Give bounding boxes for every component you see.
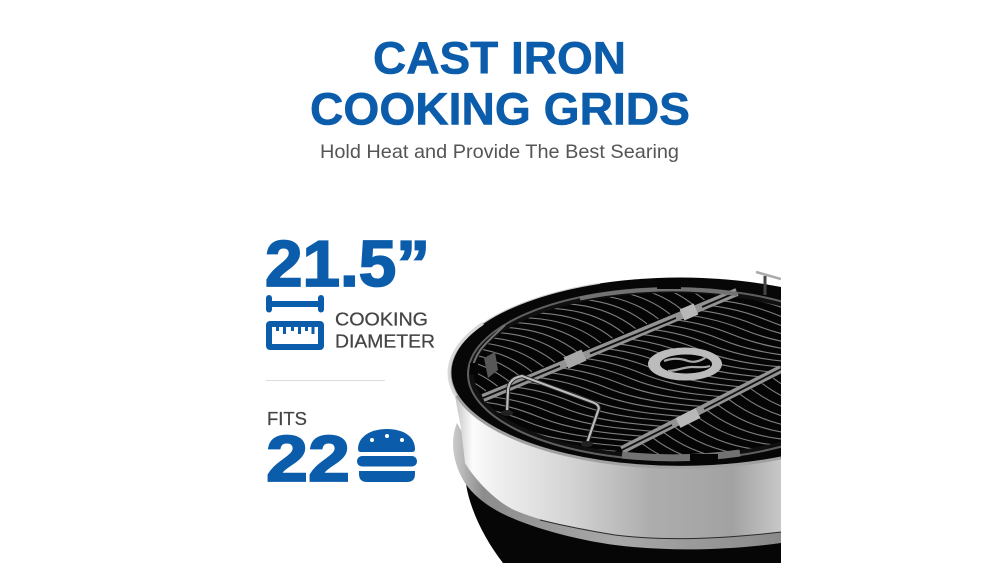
diameter label (335, 308, 435, 352)
fits label: FITS (267, 408, 307, 429)
diameter value: 21.5” (265, 227, 430, 300)
icon: ruler (266, 295, 324, 350)
emblem (648, 348, 722, 380)
stat: fits 22 burgers (266, 408, 417, 495)
grid corner block (484, 352, 498, 378)
grid edge segments (472, 289, 740, 458)
subtitle: Hold Heat and Provide The Best Searing (320, 141, 679, 163)
product photo: kettle grill with cast iron grids (448, 270, 781, 563)
diameter label: DIAMETER (335, 330, 435, 352)
black rim tabs (470, 279, 718, 463)
burger count: 22 (266, 422, 350, 495)
stat: cooking diameter (265, 227, 435, 352)
icon: burger (357, 429, 417, 482)
rim (448, 278, 781, 468)
title: CAST IRON (373, 32, 626, 84)
lid handle: front (501, 376, 599, 447)
steel band (455, 396, 781, 538)
cooking grid (467, 287, 781, 462)
title (310, 32, 690, 134)
lower ring (453, 423, 781, 549)
lid handle: rear (756, 272, 781, 295)
title: COOKING GRIDS (310, 84, 690, 134)
grid bars (483, 292, 781, 450)
diameter label: COOKING (335, 308, 428, 330)
grill bowl (466, 484, 781, 563)
